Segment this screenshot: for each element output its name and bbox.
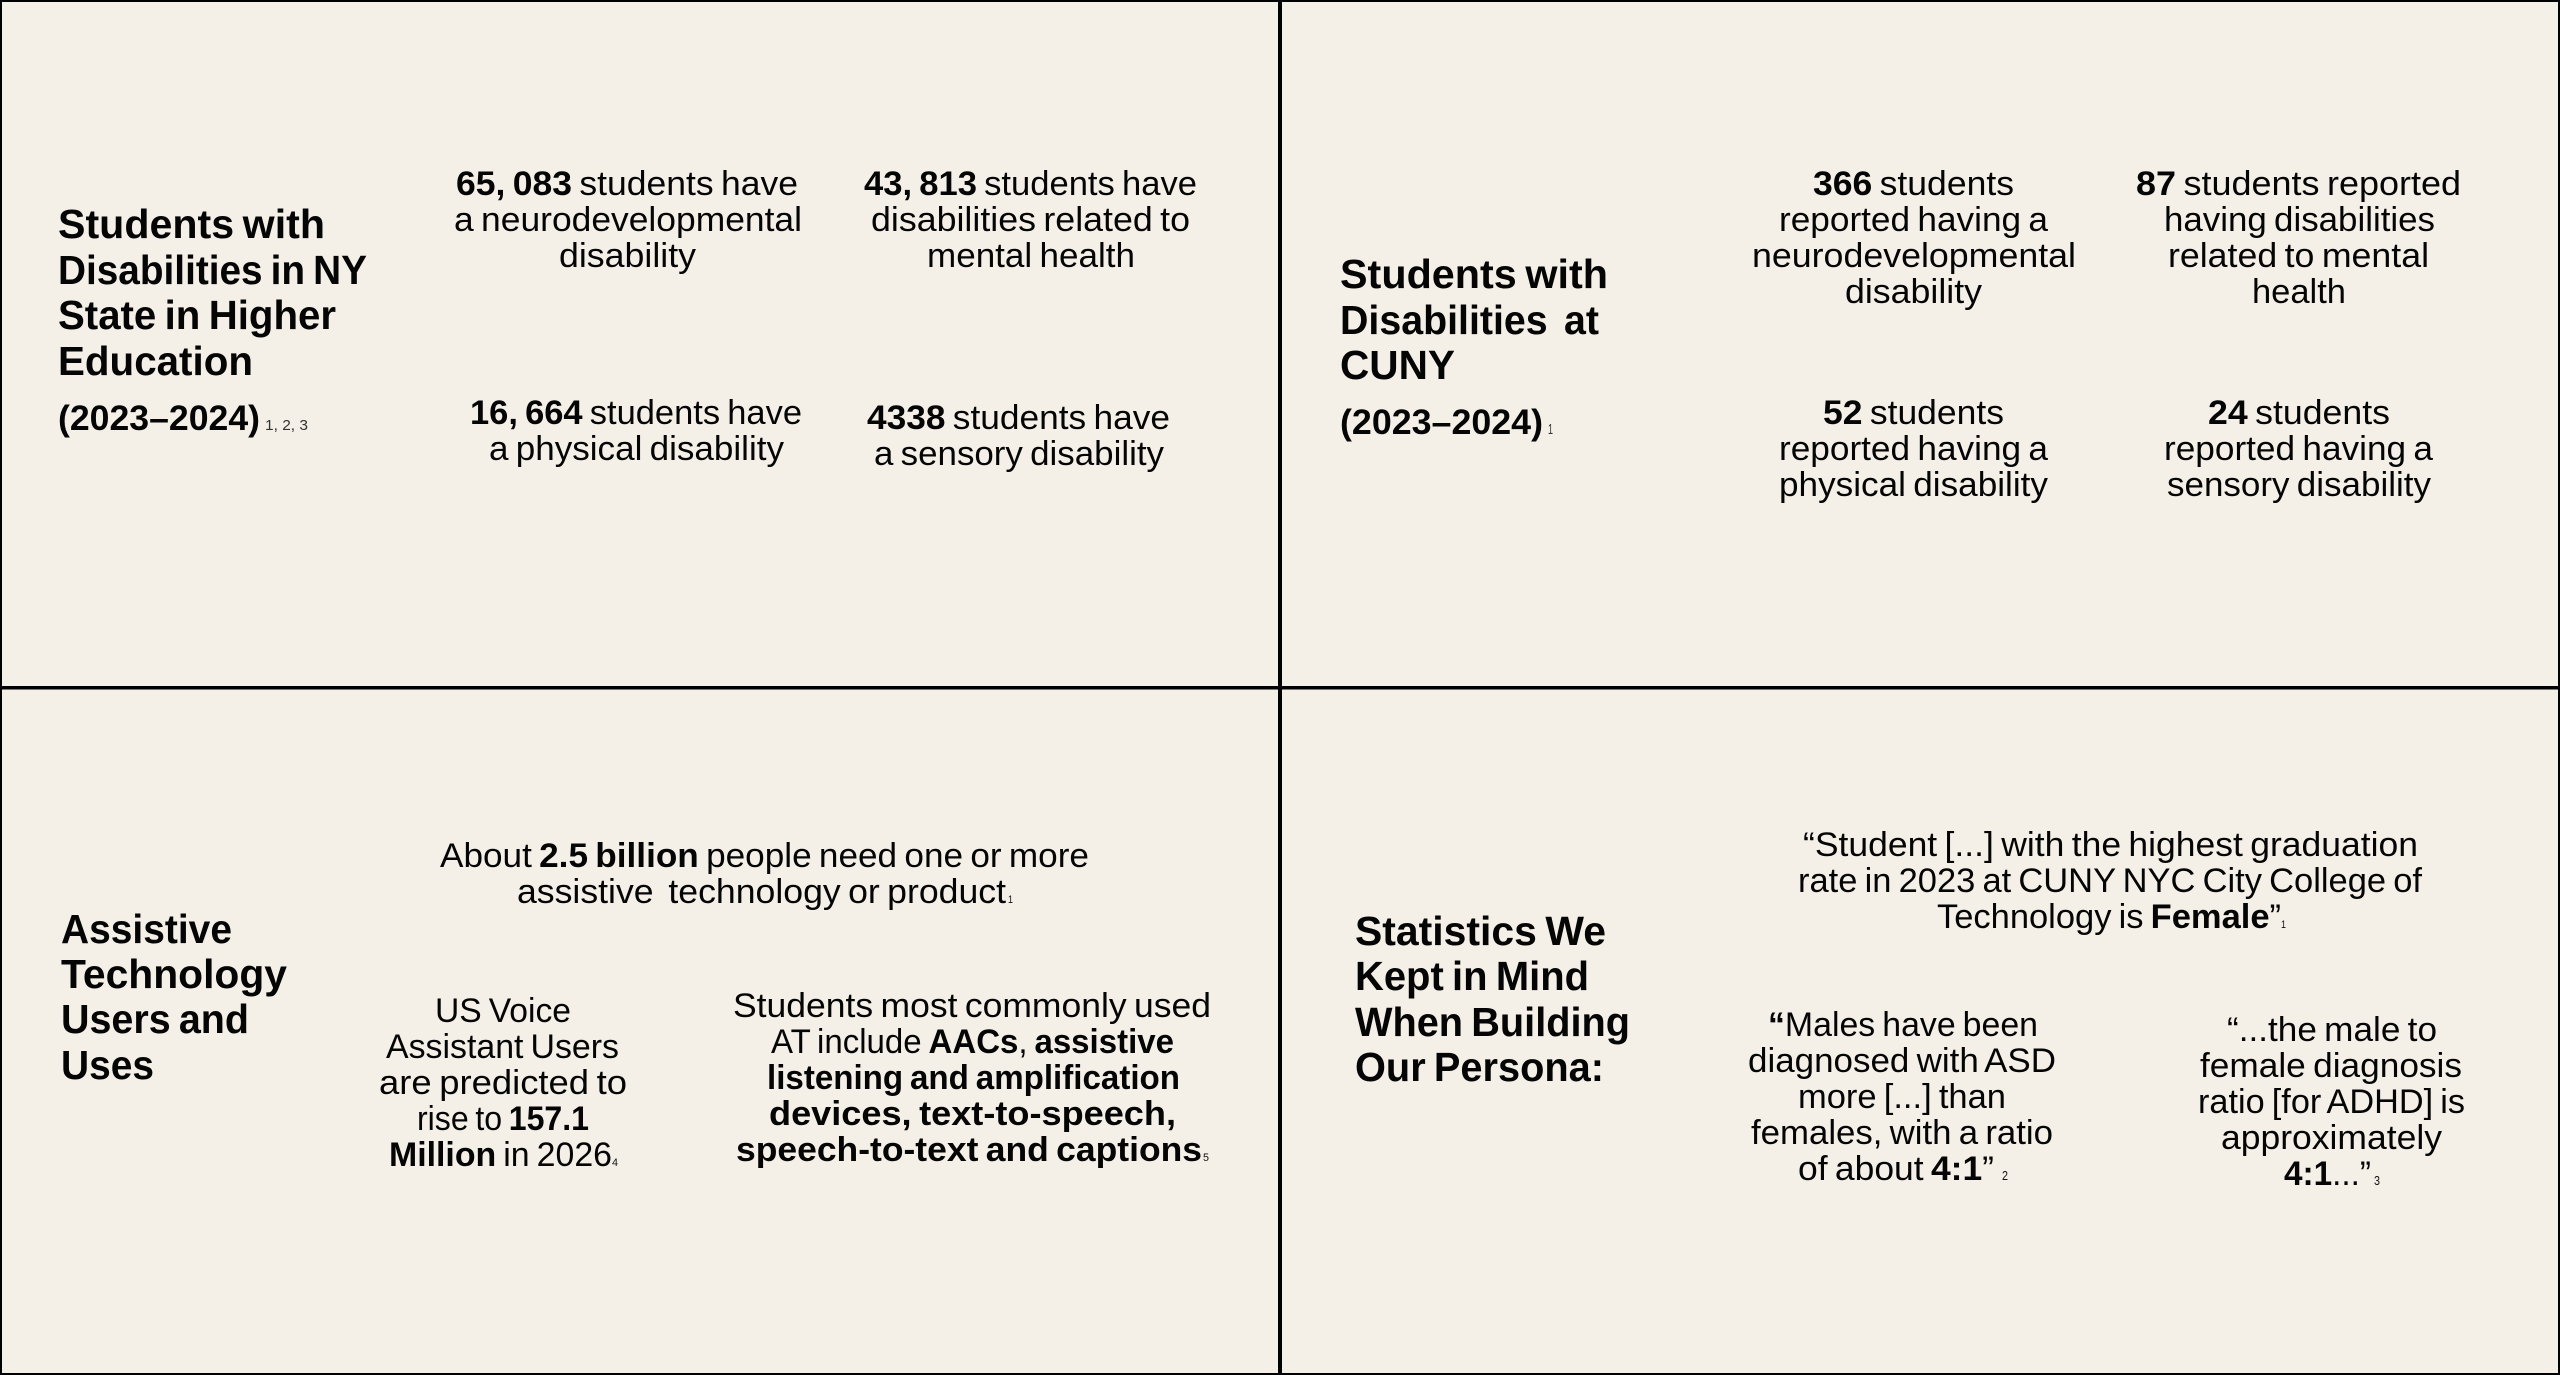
stat: sensory: reported having a — [2164, 430, 2433, 468]
stat: commonly used AT: listening and amplification — [767, 1059, 1180, 1097]
date range with citation: (2023–2024) — [1340, 403, 1543, 442]
stat: commonly used AT — [733, 987, 1211, 1169]
stat: commonly used AT: speech-to-text and captions — [736, 1131, 1202, 1169]
panel: statistics kept in mind — [1355, 826, 2465, 1193]
stat: neurodevelopmental: disability — [1845, 273, 1982, 311]
stat: physical: a physical disability — [489, 430, 784, 468]
stat: 2.5 billion people: 1 — [1008, 894, 1013, 906]
heading: NY State: Students with — [58, 201, 325, 247]
heading: CUNY: Disabilities at — [1340, 297, 1599, 343]
quote: ADHD ratio: approximately — [2221, 1119, 2442, 1157]
stat: voice assistant users: US Voice — [435, 992, 571, 1030]
panel: students with disabilities in NY State — [58, 165, 1197, 473]
heading: persona statistics: Our Persona: — [1355, 1044, 1604, 1090]
heading: persona statistics — [1355, 908, 1630, 1090]
stat: voice assistant users: 4 — [612, 1157, 618, 1169]
panel: students with disabilities at CUNY — [1340, 165, 2461, 504]
date range with citation: 1 — [1548, 421, 1553, 438]
stat: neurodevelopmental: 65, 083 students have — [456, 165, 798, 203]
stat: voice assistant users: are predicted to — [379, 1064, 627, 1102]
stat: neurodevelopmental — [1752, 165, 2076, 311]
stat: voice assistant users: rise to 157.1 — [417, 1100, 589, 1138]
heading: assistive technology: Technology — [61, 951, 287, 997]
quote: ADHD ratio: “...the male to — [2227, 1011, 2437, 1049]
quote: highest graduation rate: 1 — [2281, 919, 2286, 931]
stat: physical: reported having a — [1779, 430, 2048, 468]
heading: persona statistics: Statistics We — [1355, 908, 1606, 954]
quote: ASD ratio — [1748, 1006, 2056, 1188]
stat: commonly used AT: AT include AACs, assistive — [771, 1023, 1174, 1061]
heading: assistive technology: Users and — [61, 996, 249, 1042]
stat: commonly used AT: devices, text-to-speech, — [769, 1095, 1176, 1133]
date range with citations: 1, 2, 3 — [265, 417, 308, 434]
stat: voice assistant users: Assistant Users — [386, 1028, 619, 1066]
stat: physical: 52 students — [1823, 394, 2004, 432]
stat: neurodevelopmental: neurodevelopmental — [1752, 237, 2076, 275]
quote: ASD ratio: of about 4:1” — [1798, 1150, 1994, 1188]
stat: sensory: 24 students — [2208, 394, 2390, 432]
stat: neurodevelopmental: disability — [559, 237, 696, 275]
stat: sensory: a sensory disability — [874, 435, 1164, 473]
stat: mental health: disabilities related to — [871, 201, 1190, 239]
quote: highest graduation rate: Technology is Female” — [1937, 898, 2281, 936]
quote: ASD ratio: diagnosed with ASD — [1748, 1042, 2056, 1080]
stat: 2.5 billion people: About 2.5 billion people need one or more — [440, 837, 1089, 875]
quote: ADHD ratio — [2198, 1011, 2465, 1193]
quote: ASD ratio: 2 — [2002, 1168, 2008, 1183]
stat: sensory: sensory disability — [2167, 466, 2431, 504]
stat: sensory — [2164, 394, 2433, 504]
stat: mental health: mental health — [927, 237, 1135, 275]
stat: 2.5 billion people — [440, 837, 1089, 911]
quote: ADHD ratio: female diagnosis — [2200, 1047, 2462, 1085]
quote: highest graduation rate: rate in 2023 at CUNY NYC City College of — [1798, 862, 2423, 900]
panel: assistive technology users and uses — [61, 837, 1211, 1174]
stat: mental health: 87 students reported — [2136, 165, 2461, 203]
stat: neurodevelopmental: a neurodevelopmental — [454, 201, 802, 239]
stat: physical: physical disability — [1779, 466, 2048, 504]
quote: ASD ratio: females, with a ratio — [1751, 1114, 2053, 1152]
quote: highest graduation rate — [1798, 826, 2423, 936]
date range with citations: (2023–2024) — [58, 399, 260, 438]
stat: commonly used AT: 5 — [1203, 1152, 1209, 1164]
heading: assistive technology: Uses — [61, 1042, 154, 1088]
stat: physical: 16, 664 students have — [470, 394, 802, 432]
stat: neurodevelopmental — [454, 165, 802, 275]
quote: ADHD ratio: 4:1...” — [2284, 1155, 2371, 1193]
heading: assistive technology — [61, 906, 287, 1088]
stat: sensory — [867, 399, 1170, 473]
stat: mental health: health — [2252, 273, 2346, 311]
heading: persona statistics: When Building — [1355, 999, 1630, 1045]
heading: CUNY: CUNY — [1340, 342, 1455, 388]
stat: physical — [1779, 394, 2048, 504]
heading: persona statistics: Kept in Mind — [1355, 953, 1589, 999]
stat: voice assistant users: Million in 2026 — [389, 1136, 612, 1174]
heading: assistive technology: Assistive — [61, 906, 232, 952]
heading: CUNY: Students with — [1340, 251, 1608, 297]
stat: commonly used AT: Students most commonly used — [733, 987, 1211, 1025]
heading: NY State: State in Higher — [58, 292, 336, 338]
heading: CUNY — [1340, 251, 1608, 388]
stat: sensory: 4338 students have — [867, 399, 1170, 437]
quote: ADHD ratio: 3 — [2374, 1173, 2380, 1188]
quote: ADHD ratio: ratio [for ADHD] is — [2198, 1083, 2465, 1121]
quote: highest graduation rate: “Student [...] with the highest graduation — [1803, 826, 2418, 864]
quote: ASD ratio: more [...] than — [1798, 1078, 2006, 1116]
stat: physical — [470, 394, 802, 468]
heading: NY State: Education — [58, 338, 253, 384]
stat: mental health — [864, 165, 1197, 275]
stat: neurodevelopmental: reported having a — [1779, 201, 2048, 239]
quote: ASD ratio: “Males have been — [1768, 1006, 2038, 1044]
heading: NY State: Disabilities in NY — [58, 247, 367, 293]
stat: mental health: related to mental — [2168, 237, 2429, 275]
stat: mental health: having disabilities — [2164, 201, 2435, 239]
stat: 2.5 billion people: assistive technology or product — [517, 873, 1007, 911]
stat: neurodevelopmental: 366 students — [1813, 165, 2014, 203]
stat: mental health — [2136, 165, 2461, 311]
stat: mental health: 43, 813 students have — [864, 165, 1197, 203]
stat: voice assistant users — [379, 992, 627, 1174]
heading: NY State — [58, 201, 367, 384]
